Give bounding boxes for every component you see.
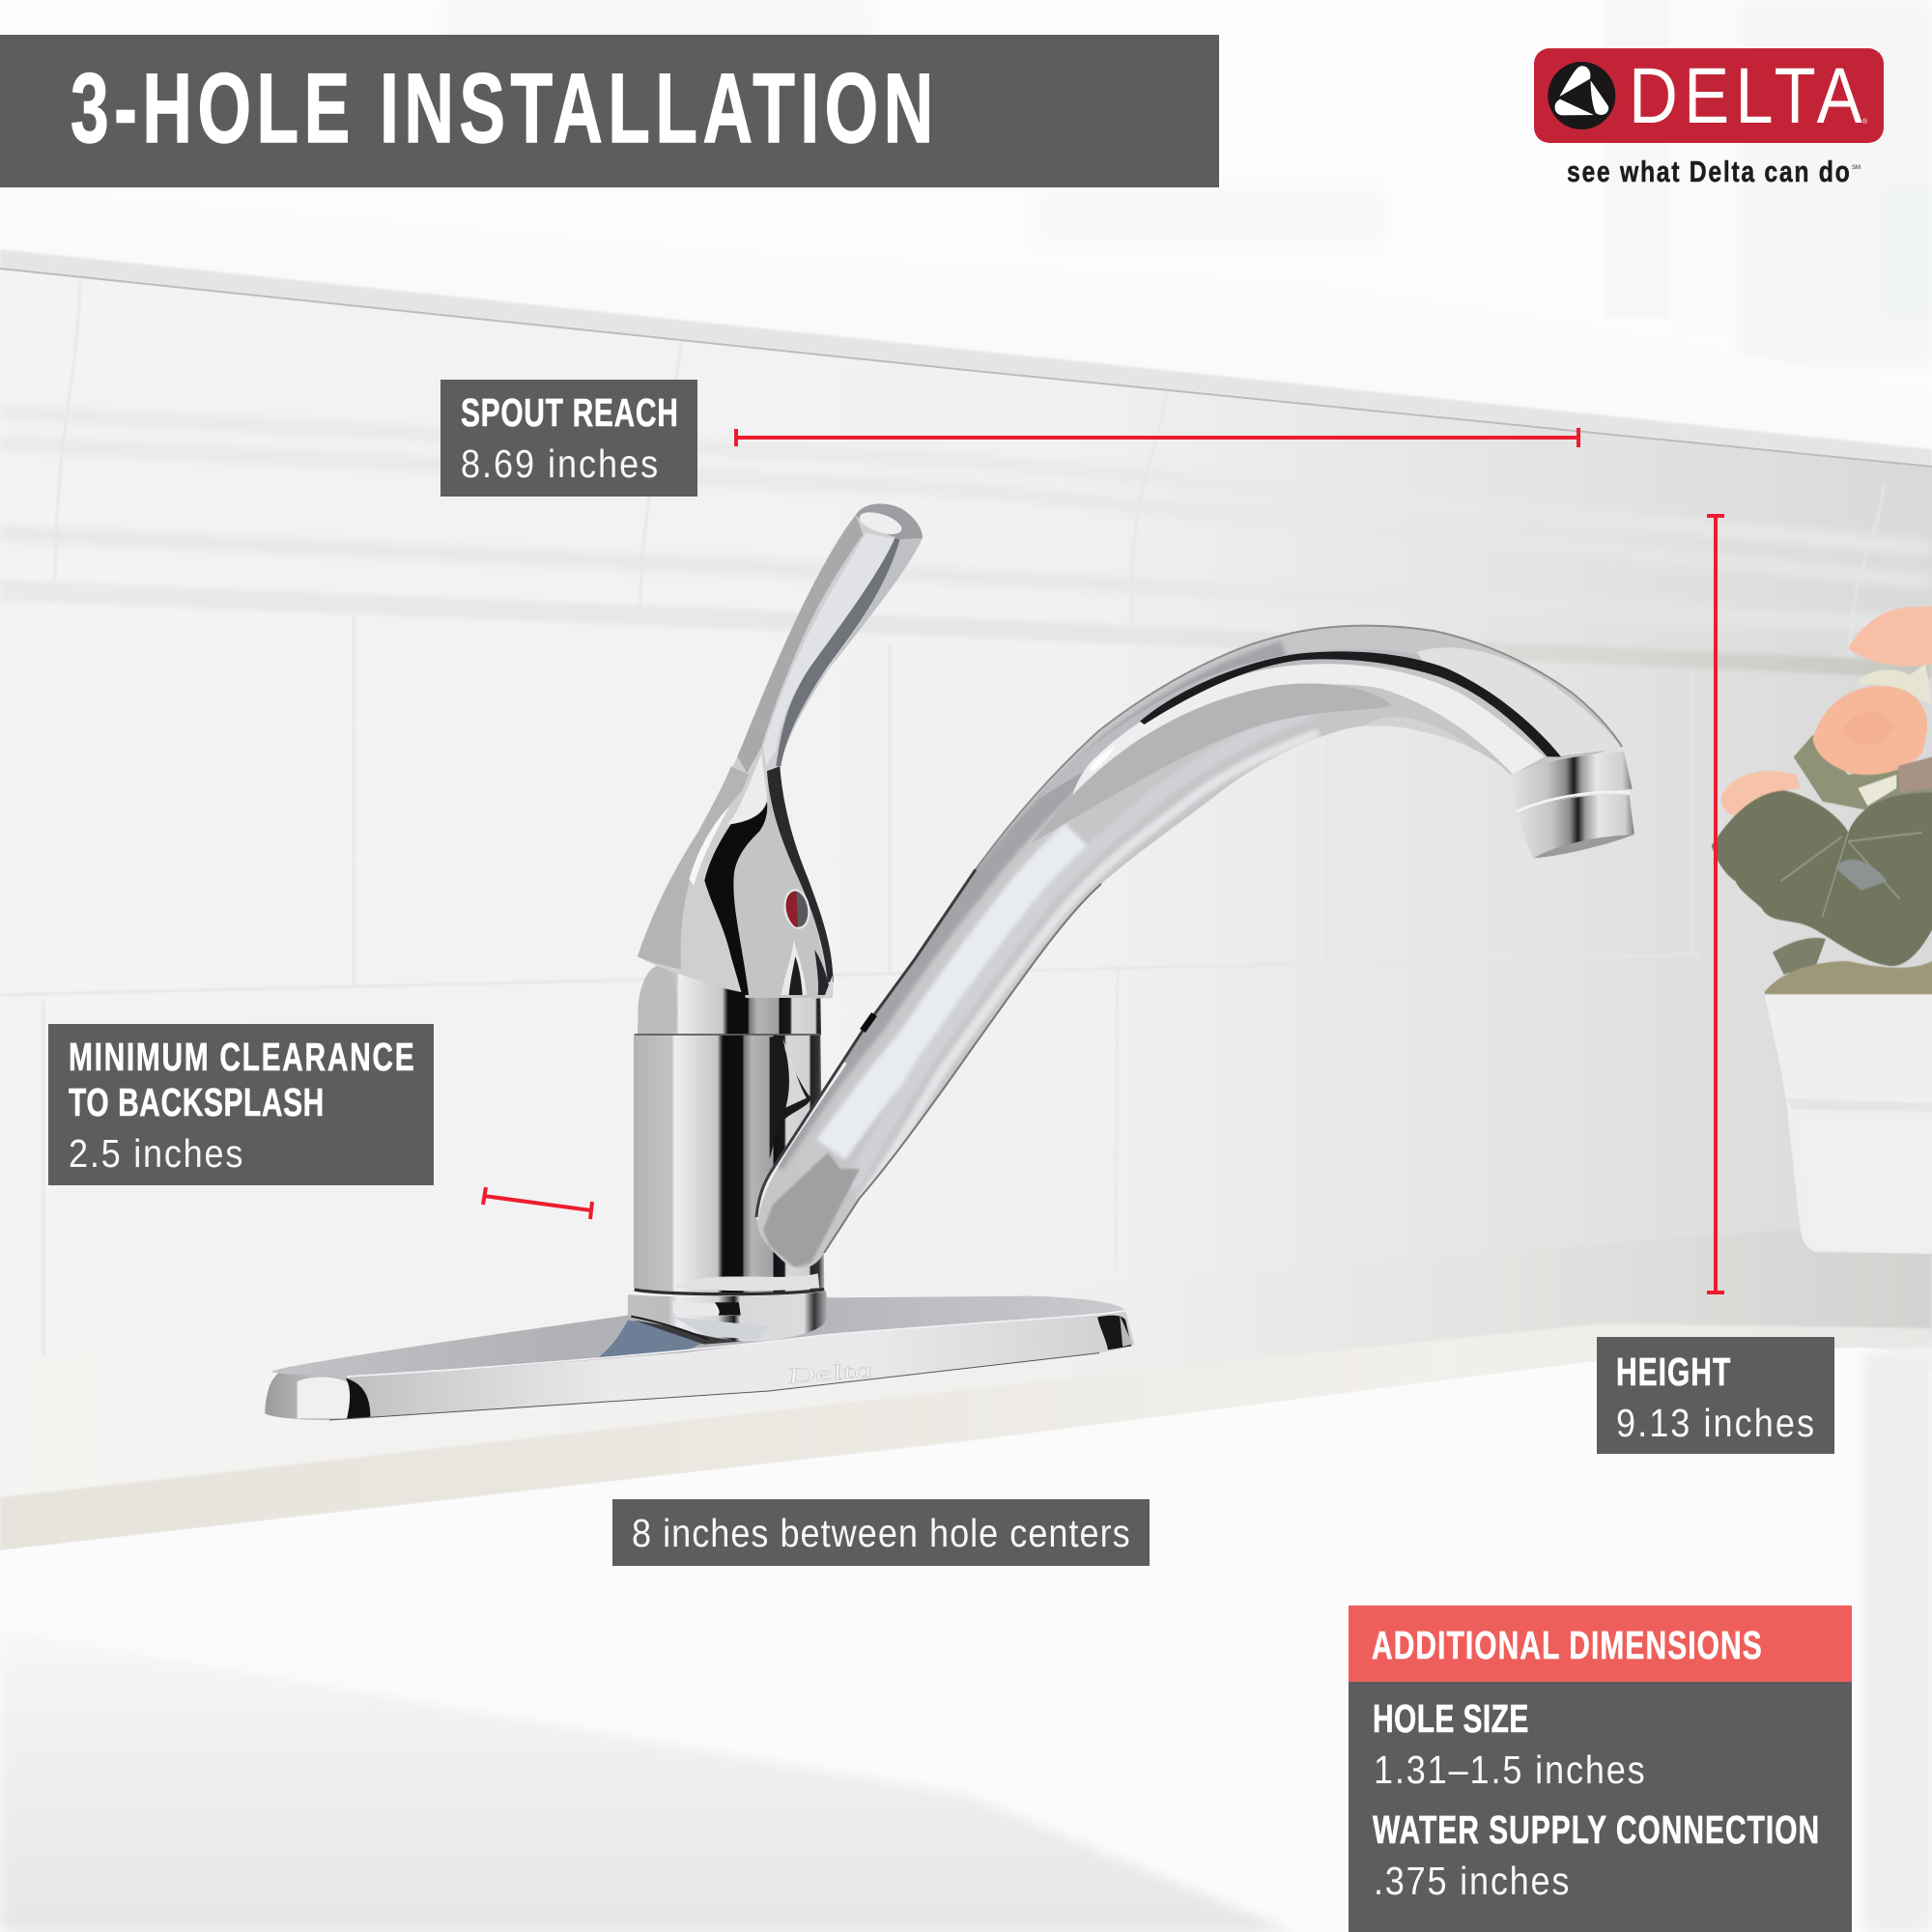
heading: SPOUT REACH — [461, 390, 678, 435]
spout edges — [756, 626, 1622, 1253]
logo wordmark: DELTA — [1629, 52, 1862, 140]
moulding bands — [0, 406, 1932, 634]
panel: additional dimensions — [1349, 1605, 1852, 1932]
white pot — [1765, 994, 1932, 1254]
logo mark — [1548, 62, 1615, 129]
red indicator — [781, 887, 813, 931]
water supply value: .375 inches — [1374, 1860, 1569, 1904]
title banner — [0, 35, 1219, 187]
countertop — [0, 1219, 1932, 1499]
black line — [1140, 651, 1561, 756]
value: 9.13 inches — [1616, 1402, 1814, 1446]
deck plate — [265, 1296, 1134, 1420]
cylinder reflection — [770, 1037, 811, 1159]
panel body — [1349, 1682, 1852, 1932]
value: 8.69 inches — [461, 442, 658, 487]
moss — [1765, 961, 1932, 994]
red measure: backsplash clearance — [483, 1187, 592, 1219]
title text: 3-HOLE INSTALLATION — [71, 52, 933, 163]
handle black reflection — [704, 802, 767, 995]
upper collar — [638, 966, 831, 1035]
value: 2.5 inches — [69, 1132, 242, 1177]
bright shoulder — [1416, 647, 1622, 756]
logo registered mark: ® — [1862, 118, 1868, 126]
white band — [1072, 664, 1544, 796]
flower pot plant — [1712, 607, 1932, 1254]
plate left end — [298, 1377, 353, 1418]
label: hole centers — [612, 1499, 1150, 1566]
red measure: height — [1707, 516, 1724, 1293]
sink basin — [0, 1348, 1932, 1932]
body base reflection — [676, 1273, 819, 1291]
value: 8 inches between hole centers — [632, 1512, 1130, 1556]
tile joints — [0, 278, 1884, 1357]
pale inner — [1363, 717, 1472, 749]
nozzle — [1511, 752, 1634, 858]
sink shadow — [0, 1352, 1932, 1932]
label: spout reach — [440, 380, 697, 497]
chair rail — [0, 580, 1932, 678]
Delta logo — [1534, 48, 1884, 188]
band above black line — [1039, 649, 1626, 799]
plate front — [265, 1296, 1134, 1420]
water supply heading: WATER SUPPLY CONNECTION — [1373, 1807, 1819, 1852]
tagline service mark: SM — [1852, 165, 1861, 171]
spout lengthwise bands — [773, 652, 1319, 1203]
lever and handle — [638, 504, 923, 998]
plate bottom line — [329, 1353, 1099, 1420]
handle body — [733, 773, 828, 998]
tagline: see what Delta can do — [1567, 155, 1850, 188]
countertop front edge — [0, 1323, 1932, 1550]
hole size value: 1.31–1.5 inches — [1374, 1748, 1645, 1793]
green leaves — [1712, 790, 1932, 975]
spout base blob — [763, 1152, 860, 1267]
handle lower reflections — [781, 940, 807, 995]
plate right end — [1097, 1316, 1131, 1350]
pink flowers — [1721, 607, 1932, 817]
panel header: ADDITIONAL DIMENSIONS — [1372, 1623, 1762, 1667]
gray inner — [1031, 683, 1391, 843]
handle fin — [638, 766, 749, 969]
heading: HEIGHT — [1616, 1350, 1730, 1394]
heading second line: TO BACKSPLASH — [69, 1080, 324, 1124]
plate blue reflection — [599, 1321, 710, 1357]
window area — [0, 0, 1932, 483]
plate top face — [270, 1296, 1125, 1377]
spout curved bands — [1031, 647, 1626, 843]
faucet — [265, 504, 1642, 1420]
panel header — [1349, 1605, 1852, 1682]
red measure: spout reach — [735, 428, 1578, 447]
window sill — [0, 188, 1932, 454]
base collar — [628, 1292, 828, 1342]
heading: MINIMUM CLEARANCE — [69, 1035, 414, 1079]
lever shading — [737, 504, 923, 773]
hole size heading: HOLE SIZE — [1373, 1696, 1528, 1741]
handle bright blob — [727, 753, 767, 824]
spout arm — [744, 618, 1642, 1285]
label: height — [1597, 1337, 1834, 1454]
tile wall — [0, 269, 1932, 1372]
plate logo: Delta — [782, 1357, 875, 1387]
label: minimum clearance — [48, 1024, 434, 1185]
body cylinder — [634, 1036, 824, 1293]
sill nosing — [0, 249, 1932, 467]
